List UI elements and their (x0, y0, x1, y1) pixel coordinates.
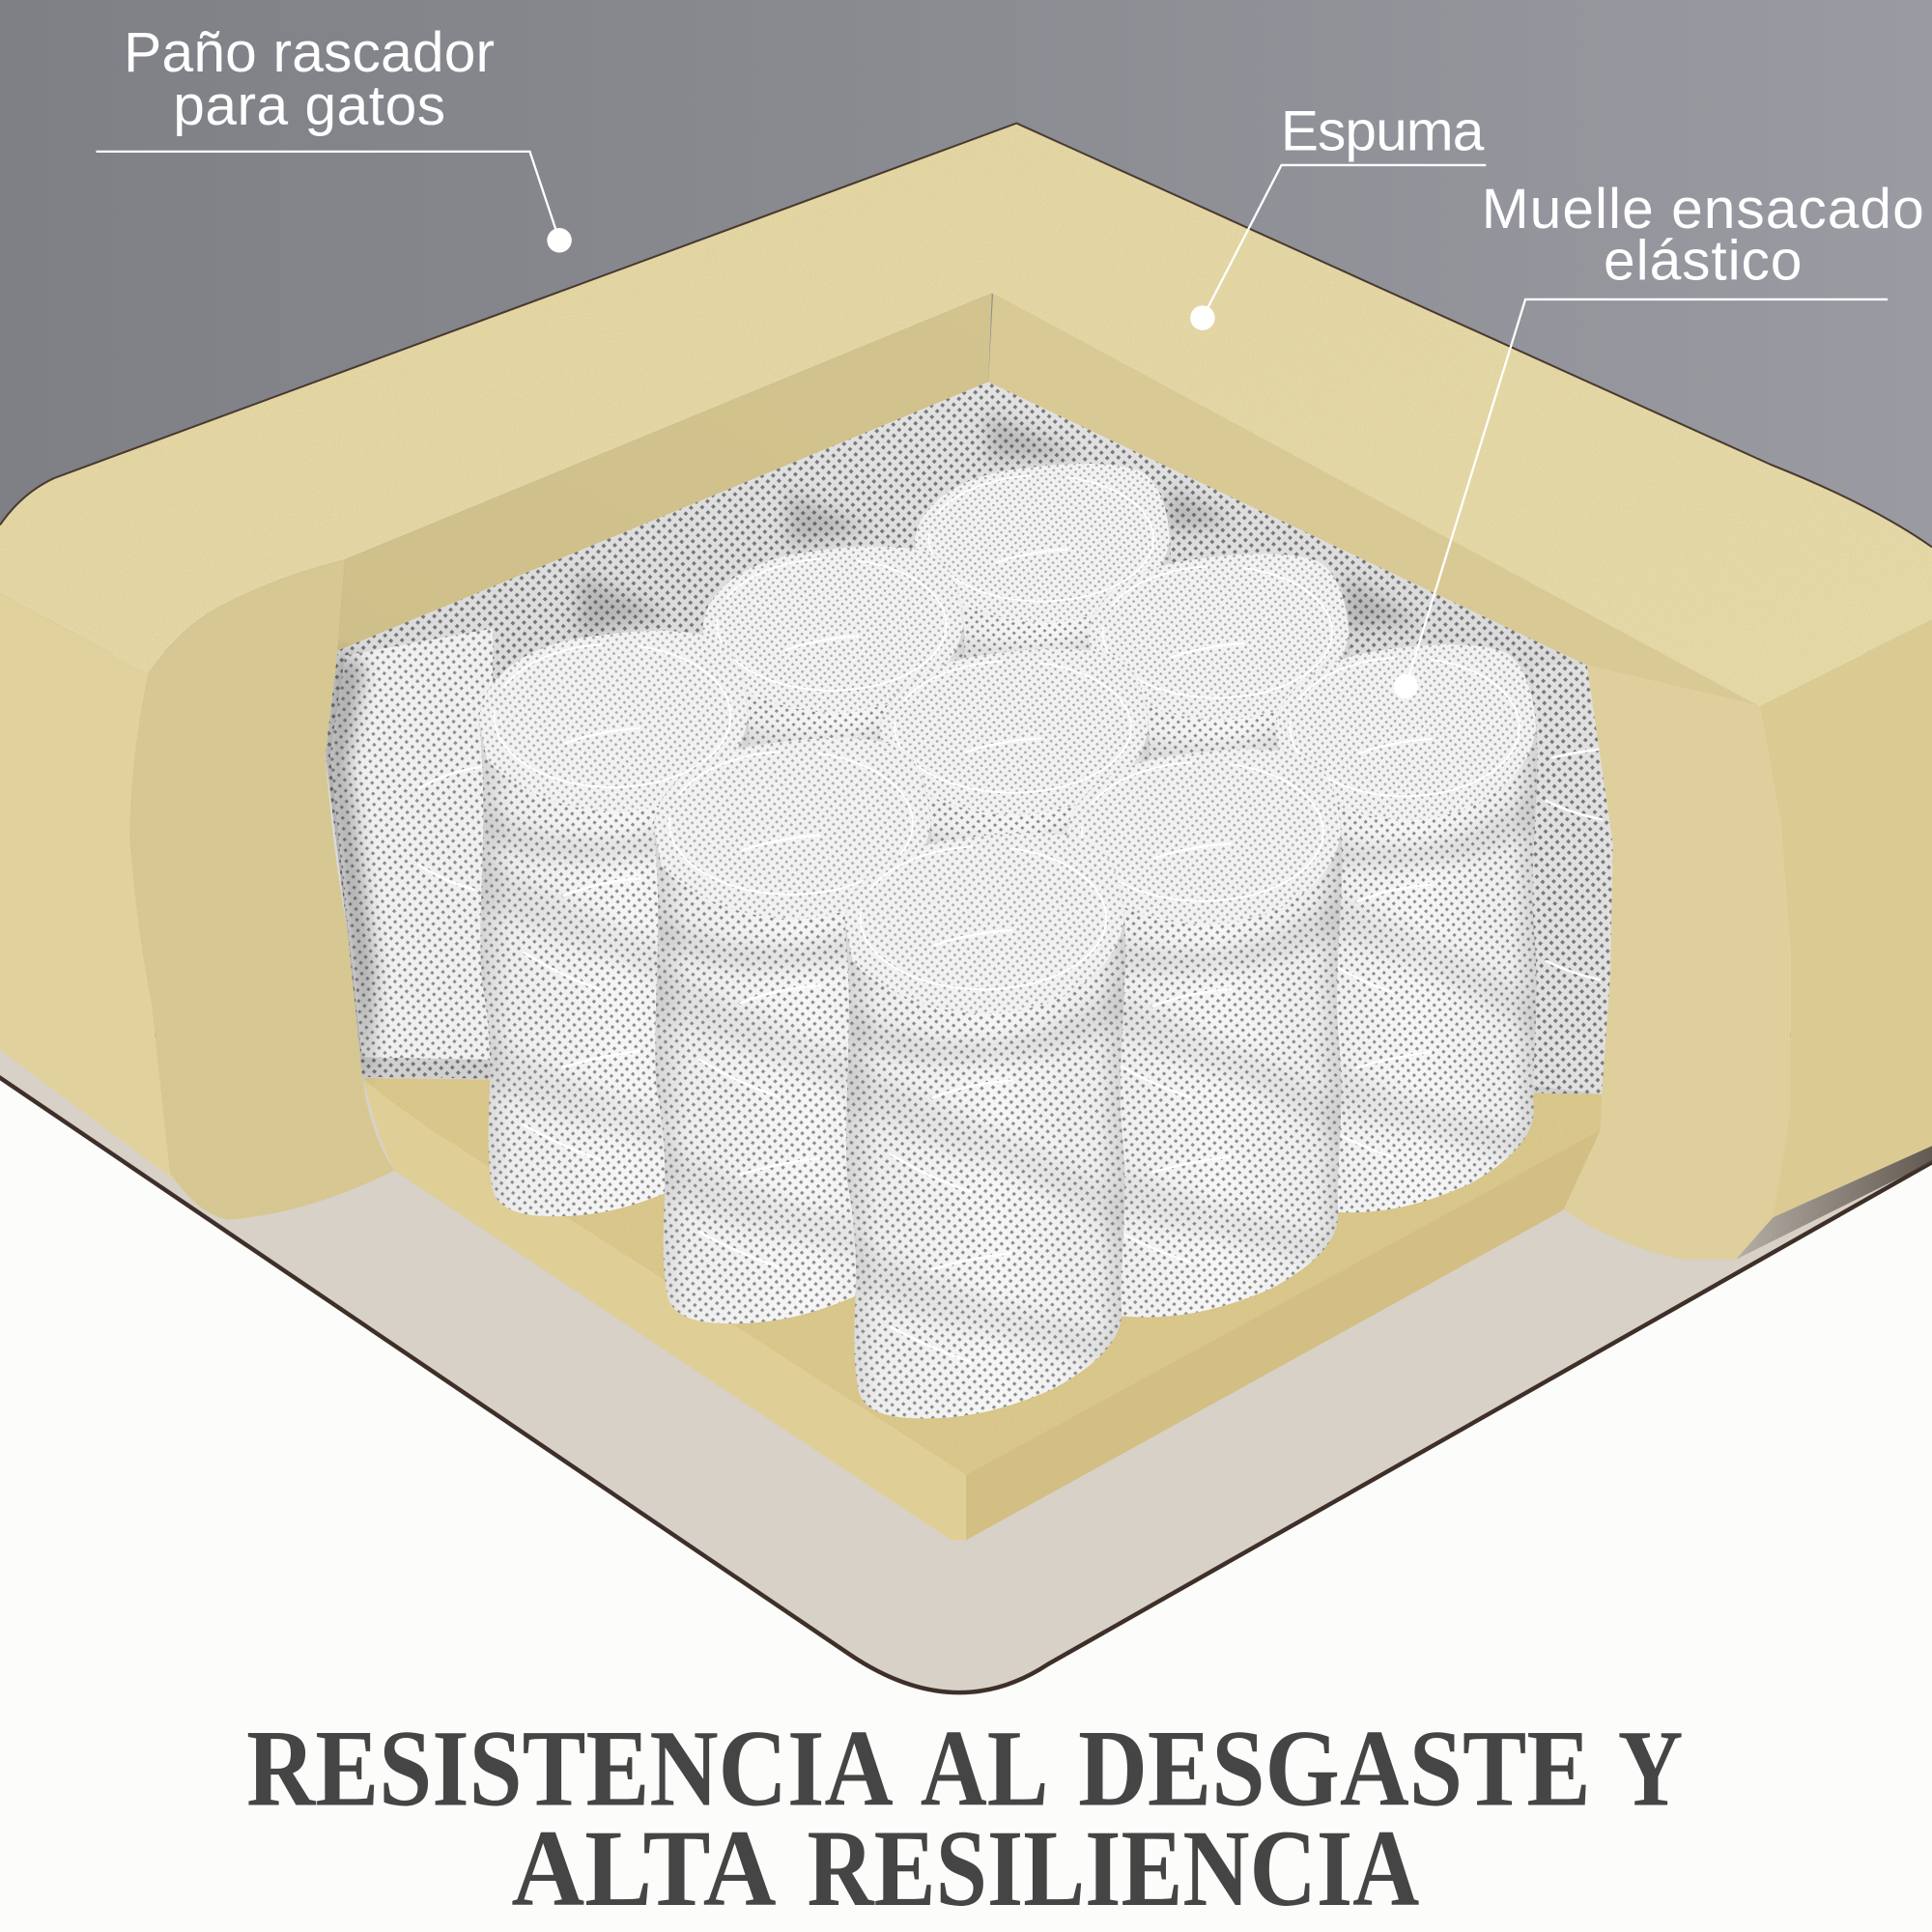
callout: scratching cloth (96, 21, 572, 252)
spring: row three left (477, 631, 751, 1216)
spring: back centre (913, 464, 1173, 979)
foam right side face (1736, 620, 1932, 1260)
foam cross-section right cut (1564, 666, 1790, 1260)
callout: pocket spring (1394, 178, 1924, 698)
inner foam wall left (337, 294, 992, 650)
foam top face (0, 124, 1932, 706)
title: RESILIENCIA (807, 1807, 1419, 1929)
spring cavity backdrop (326, 382, 1613, 1094)
callout: scratching cloth: para gatos (173, 74, 445, 137)
spring: row two right (1086, 554, 1351, 1093)
spring: row four right (1065, 750, 1344, 1318)
pocket springs (477, 464, 1539, 1418)
spring: front (842, 833, 1126, 1418)
spring: row two left (700, 547, 966, 1085)
spring: row three centre (877, 649, 1151, 1187)
bottom foam slab (363, 1078, 1602, 1540)
bottom fabric layer (0, 1035, 1932, 1692)
spring: row three right (1273, 644, 1539, 1212)
callout: pocket spring: elástico (1604, 230, 1802, 293)
back row pockets (326, 629, 1613, 1094)
title: ALTA (511, 1807, 777, 1929)
foam cross-section left side (0, 594, 228, 1220)
inner foam wall right (988, 294, 1759, 706)
callout: foam (1190, 100, 1486, 330)
foam cross-section left cut (129, 559, 394, 1220)
grey scratching cloth (0, 0, 1932, 653)
title: Y (1618, 1708, 1683, 1830)
title: AL (921, 1708, 1048, 1830)
spring: row four left (651, 738, 933, 1323)
callout: scratching cloth: Paño rascador (124, 21, 495, 84)
title: DESGASTE (1078, 1708, 1591, 1830)
callout: foam: Espuma (1281, 100, 1485, 163)
callout: pocket spring: Muelle ensacado (1482, 178, 1924, 241)
title: RESISTENCIA (246, 1708, 894, 1830)
title (246, 1708, 1683, 1929)
